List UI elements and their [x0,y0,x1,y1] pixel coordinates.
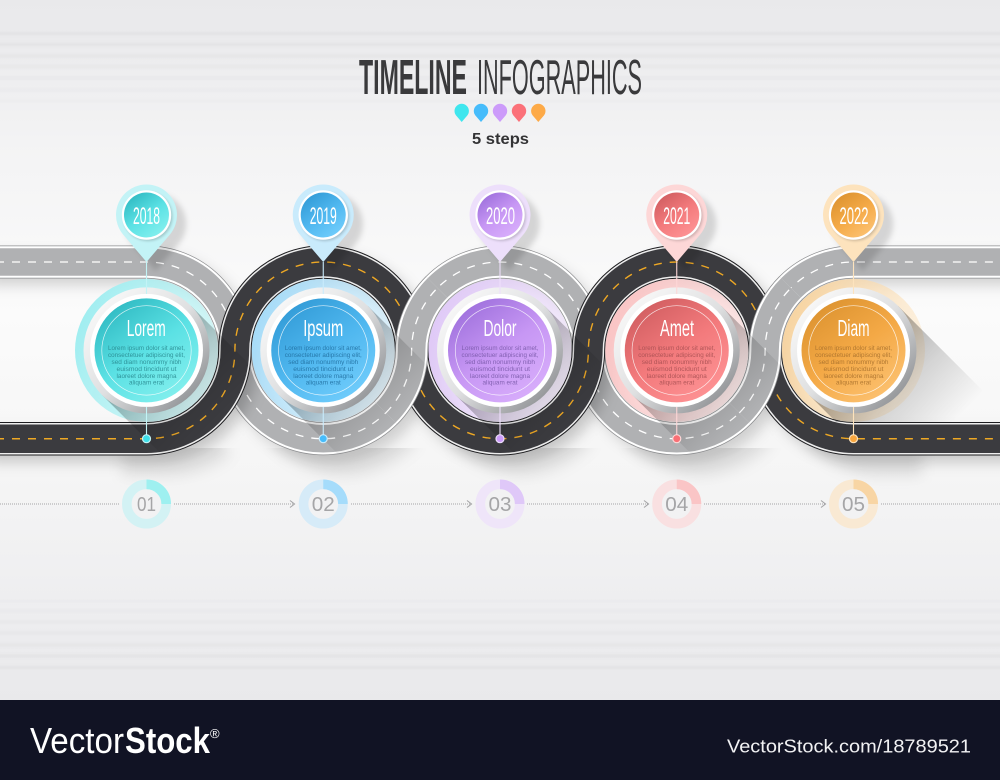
step 5 body text: Lorem ipsum dolor sit amet, [815,345,892,352]
step 4 body text: euismod tincidunt ut [647,366,707,373]
step 5 body text: euismod tincidunt ut [824,366,884,373]
step 1 body text: aliquam erat [129,380,164,386]
step 5 heading: Diam [838,315,870,341]
step 4 body text: consectetuer adipiscing elit, [638,352,715,359]
step 1 body text: euismod tincidunt ut [116,366,177,373]
road: grey winding road [0,262,1000,447]
step 3 body text [462,345,539,386]
step 1 body text [108,345,185,386]
watermark logo: ® [210,726,220,741]
text: INFOGRAPHICS [477,51,642,105]
step 3 body text: euismod tincidunt ut [470,366,530,373]
step 2 body text: consectetuer adipiscing elit, [285,352,362,359]
step 2 heading: Ipsum [303,315,343,341]
pin: 2021 [646,185,716,443]
step marker 02 [304,484,343,524]
step marker 03 [480,484,520,524]
step marker 05 [834,484,873,524]
step marker 03: 03 [488,494,512,516]
step 5 body text: laoreet dolore magna [824,373,884,380]
long road shadows below the roads [122,432,922,461]
step 2 body text: sed diam nonummy nibh [288,359,359,366]
step 2 body text: Lorem ipsum dolor sit amet, [285,345,362,352]
step 2 body text: euismod tincidunt ut [293,366,354,373]
subtitle: 5 steps [472,131,529,148]
pin: 2018: 2018 [133,203,160,230]
step 2 body text [285,345,362,386]
pin: 2020: 2020 [486,203,515,230]
panel: step 3 Dolor [428,279,603,453]
pin: 2018 [116,185,186,443]
footer banner [0,700,1000,780]
step 4 body text [638,345,715,386]
step 5 body text: aliquam erat [836,380,871,386]
step 5 body text: consectetuer adipiscing elit, [815,352,892,359]
road: grey overpass at crossings [386,288,791,413]
step 4 body text: Lorem ipsum dolor sit amet, [638,345,715,352]
pin: 2019 [293,185,363,443]
step 2 body text: aliquam erat [306,380,341,386]
step marker 01: 01 [137,494,156,516]
step 3 body text: aliquam erat [482,380,518,386]
step 1 body text: laoreet dolore magna [116,373,177,380]
step 1 heading: Lorem [127,315,166,341]
pin: 2022: 2022 [840,203,868,230]
pin: 2022 [823,185,893,443]
panel: step 5 Diam [782,279,974,422]
road: dark asphalt winding road [0,262,1000,447]
step 5 body text: sed diam nonummy nibh [818,359,889,366]
step marker 05: 05 [842,494,865,516]
pin: 2019: 2019 [310,203,337,230]
dotted timeline with arrows [0,500,1000,508]
pin: 2020 [470,185,540,443]
step marker 04: 04 [665,494,688,516]
step 1 body text: sed diam nonummy nibh [112,359,182,366]
step 3 body text: Lorem ipsum dolor sit amet, [462,345,539,352]
watermark logo: Vector [30,720,124,761]
step marker 01 [127,484,166,524]
step marker 02: 02 [312,494,335,516]
step 3 heading: Dolor [484,315,517,341]
step 3 body text: consectetuer adipiscing elit, [462,352,539,359]
watermark logo [30,720,220,761]
panel: step 1 Lorem [75,279,250,453]
step 1 body text: consectetuer adipiscing elit, [108,352,185,359]
step 4 body text: sed diam nonummy nibh [642,359,712,366]
pin: 2021: 2021 [663,203,690,230]
panel: step 2 Ipsum [252,278,426,453]
step 4 heading: Amet [660,315,694,341]
step 1 body text: Lorem ipsum dolor sit amet, [108,345,185,352]
watermark url: VectorStock.com/18789521 [727,736,971,757]
title: TIMELINE [359,51,467,105]
step 3 body text: sed diam nonummy nibh [465,359,536,366]
step 3 body text: laoreet dolore magna [470,373,530,380]
icon: five small coloured pins [454,104,546,122]
panel: step 4 Amet [605,278,780,453]
watermark logo: Stock [125,720,211,761]
step 5 body text [815,345,892,386]
step 2 body text: laoreet dolore magna [293,373,354,380]
step marker 04 [657,484,696,524]
step 4 body text: aliquam erat [659,380,694,386]
step 4 body text: laoreet dolore magna [647,373,707,380]
